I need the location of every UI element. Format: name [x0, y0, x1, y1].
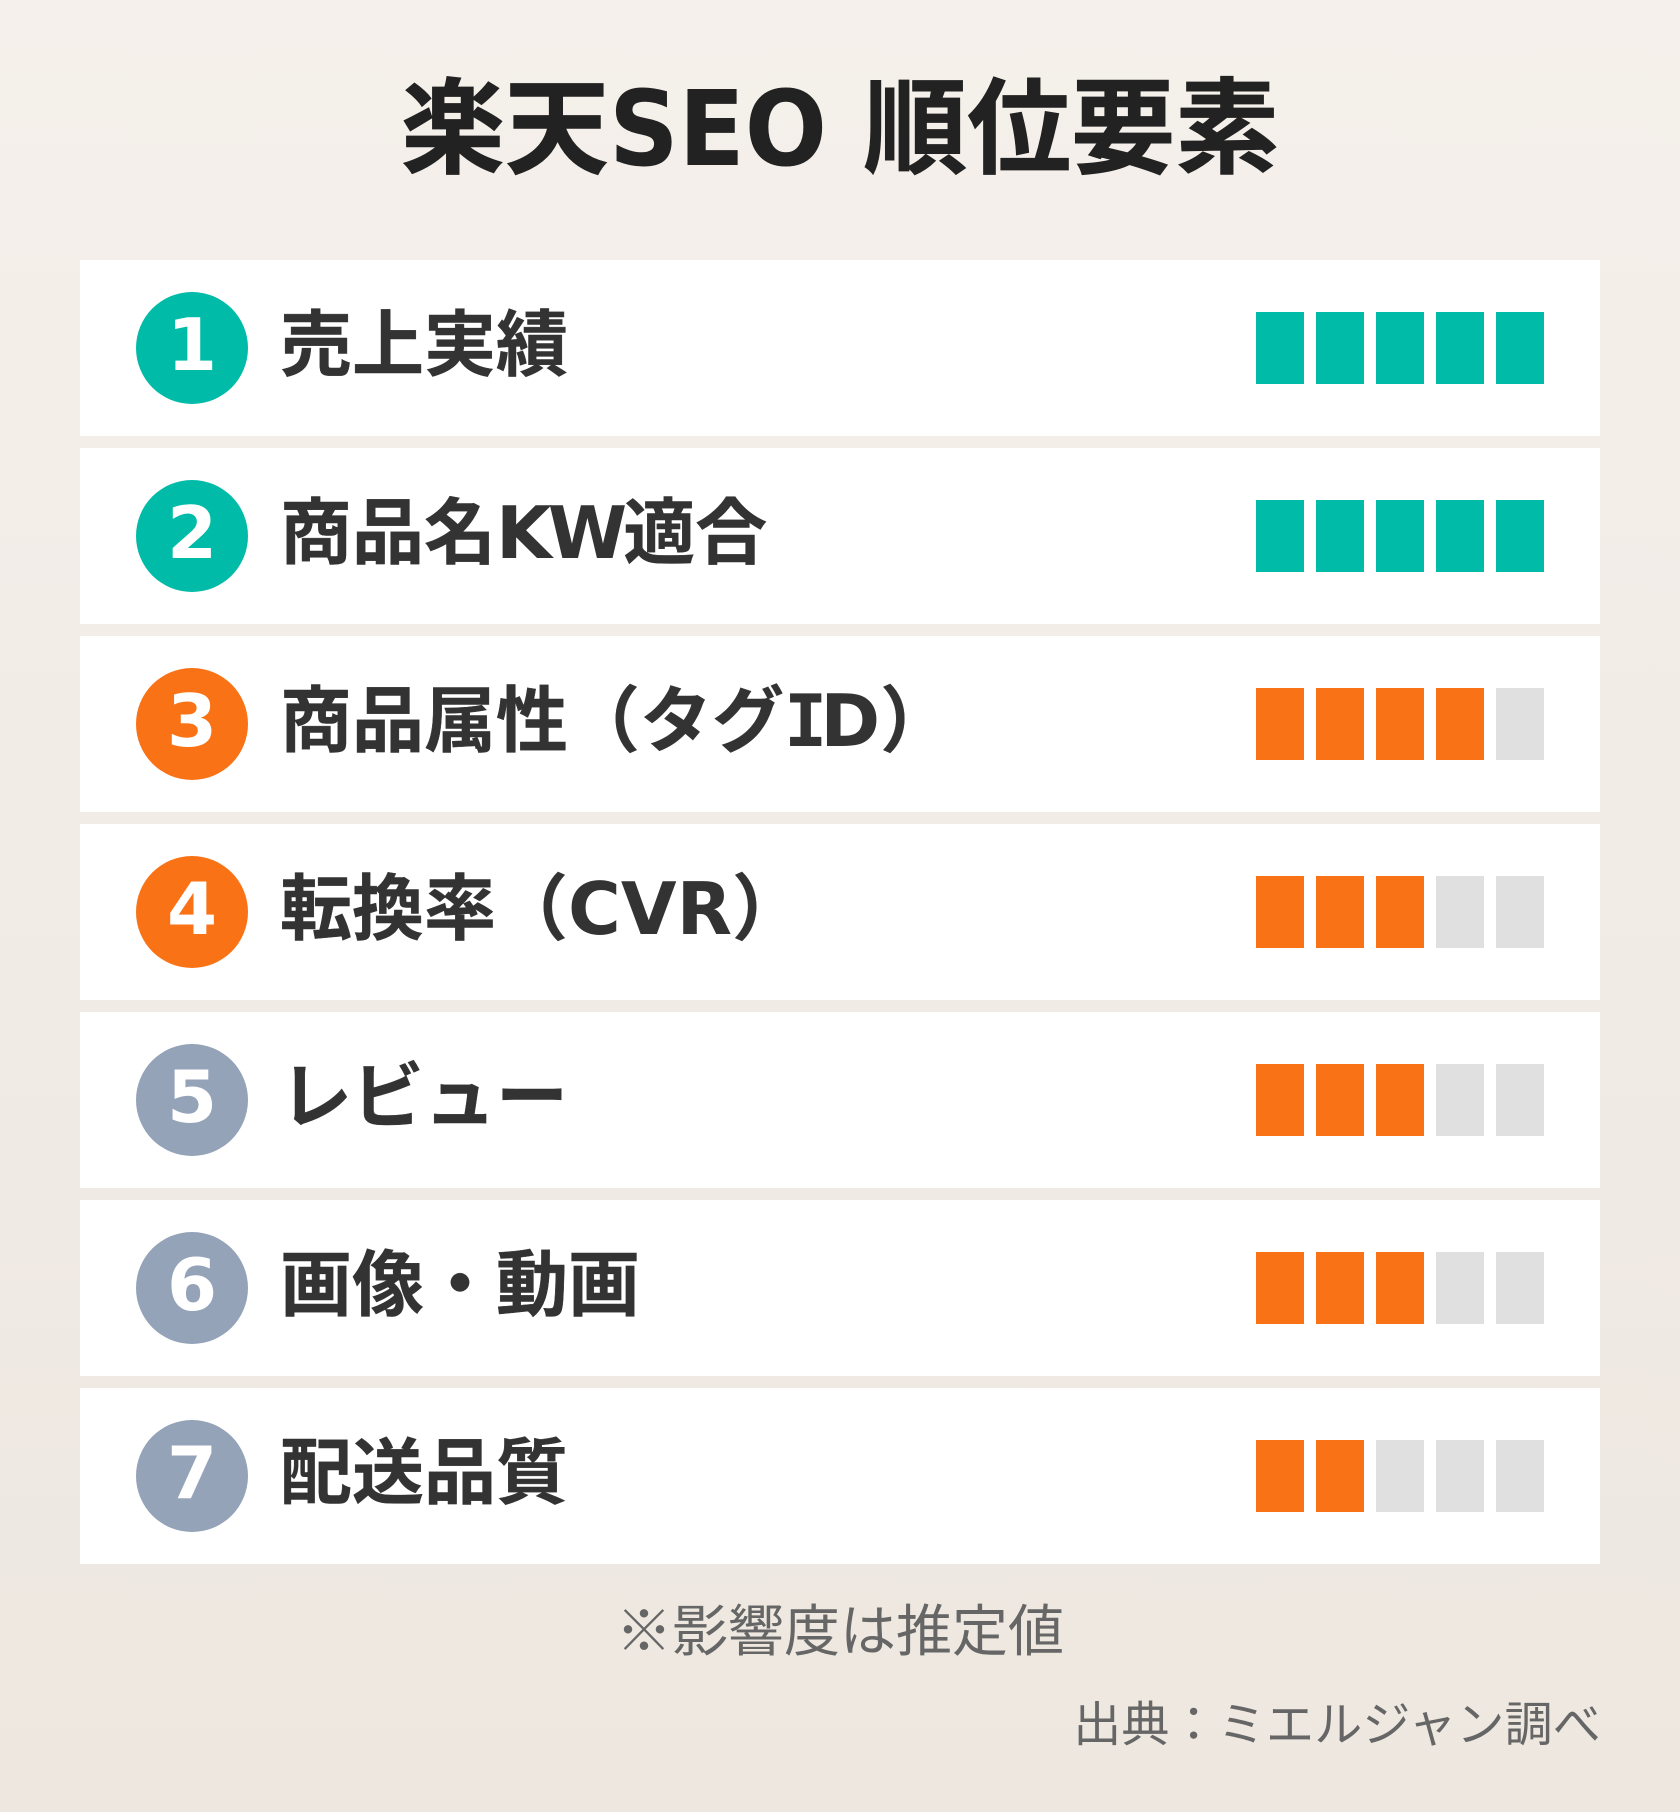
title: 楽天 順位要素 — [401, 44, 1279, 195]
rank badge 5: 5 — [167, 1055, 217, 1139]
label: rank 6: 画像・動画 — [280, 1226, 640, 1331]
rank badge 7: 7 — [167, 1431, 217, 1515]
panel: rank 5 row — [80, 1012, 1600, 1188]
note: estimate disclaimer: ※影響度は推定値 — [616, 1587, 1064, 1668]
score bars: 5 of 5 — [1256, 500, 1544, 572]
panel: rank 7 row — [80, 1388, 1600, 1564]
panel: rank 3 row — [80, 636, 1600, 812]
score bars: 3 of 5 — [1256, 876, 1544, 948]
panel: rank 1 row — [80, 260, 1600, 436]
panel: rank 4 row — [80, 824, 1600, 1000]
rank badge 4: 4 — [167, 867, 217, 951]
score bars: 5 of 5 — [1256, 312, 1544, 384]
label: rank 5: レビュー — [280, 1038, 568, 1143]
score bars: 3 of 5 — [1256, 1252, 1544, 1324]
rank badge 3: 3 — [167, 679, 217, 763]
rank badge 1 — [136, 292, 248, 404]
score bars: 4 of 5 — [1256, 688, 1544, 760]
score bars: 2 of 5 — [1256, 1440, 1544, 1512]
title: SEO — [609, 68, 827, 190]
panel: rank 2 row — [80, 448, 1600, 624]
rank badge 7 — [136, 1420, 248, 1532]
panel: rank 6 row — [80, 1200, 1600, 1376]
rank badge 6: 6 — [167, 1243, 217, 1327]
score bars: 3 of 5 — [1256, 1064, 1544, 1136]
label: rank 3: 商品属性（タグID） — [280, 662, 952, 767]
rank badge 3 — [136, 668, 248, 780]
rank badge 6 — [136, 1232, 248, 1344]
label: rank 2: 商品名KW適合 — [280, 474, 767, 579]
rank badge 2 — [136, 480, 248, 592]
source credit: 出典：ミエルジャン調べ — [1073, 1685, 1601, 1755]
label: rank 7: 配送品質 — [280, 1414, 568, 1519]
rank badge 1: 1 — [167, 303, 217, 387]
rank badge 4 — [136, 856, 248, 968]
label: rank 4: 転換率（CVR） — [280, 850, 804, 955]
label: rank 1: 売上実績 — [280, 286, 568, 391]
rank badge 5 — [136, 1044, 248, 1156]
rank badge 2: 2 — [167, 491, 217, 575]
